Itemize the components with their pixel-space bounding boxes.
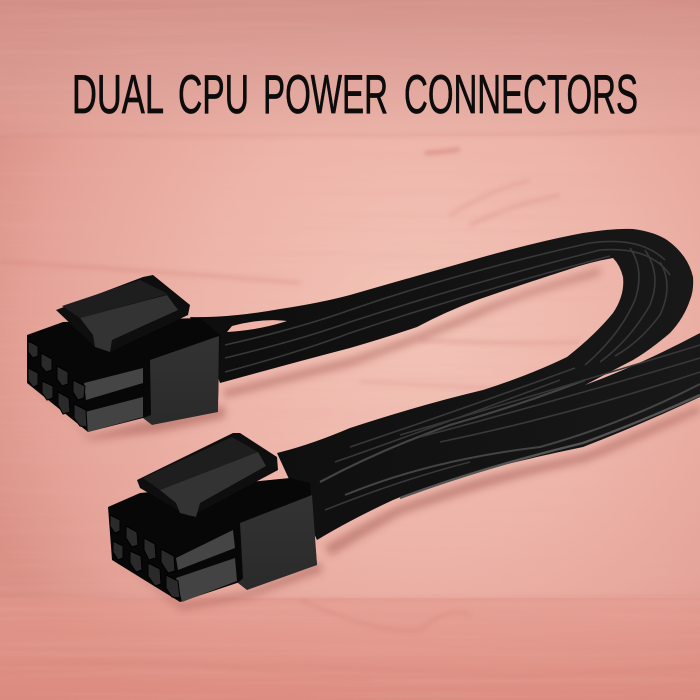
upper latch highlight xyxy=(80,295,178,352)
lower housing top xyxy=(108,478,317,602)
gap between upper cables xyxy=(227,320,287,332)
lower side face: top row xyxy=(176,530,235,570)
lower latch upper band xyxy=(143,437,258,490)
upper latch xyxy=(56,275,190,352)
lower connector xyxy=(108,433,317,602)
upper latch upper band xyxy=(62,280,168,318)
title: DUAL xyxy=(72,63,164,125)
cable bundle: loop xyxy=(190,229,700,540)
lower latch xyxy=(137,433,278,517)
lower housing block xyxy=(238,495,317,590)
lower latch highlight xyxy=(160,452,266,517)
title xyxy=(72,63,638,125)
lower connector pin holes xyxy=(110,515,180,598)
upper connector xyxy=(27,275,220,432)
lower side face: bottom row xyxy=(176,558,237,602)
cable shadows xyxy=(40,268,700,610)
title: POWER xyxy=(263,63,388,125)
upper side face: bottom row xyxy=(85,397,143,432)
cable highlights xyxy=(225,241,700,510)
title: CPU xyxy=(178,63,249,125)
upper connector pin holes xyxy=(28,341,87,427)
connector housing top xyxy=(27,318,220,432)
upper housing block xyxy=(143,336,219,425)
upper cable loop xyxy=(190,229,700,540)
upper side face: top row xyxy=(84,368,143,400)
